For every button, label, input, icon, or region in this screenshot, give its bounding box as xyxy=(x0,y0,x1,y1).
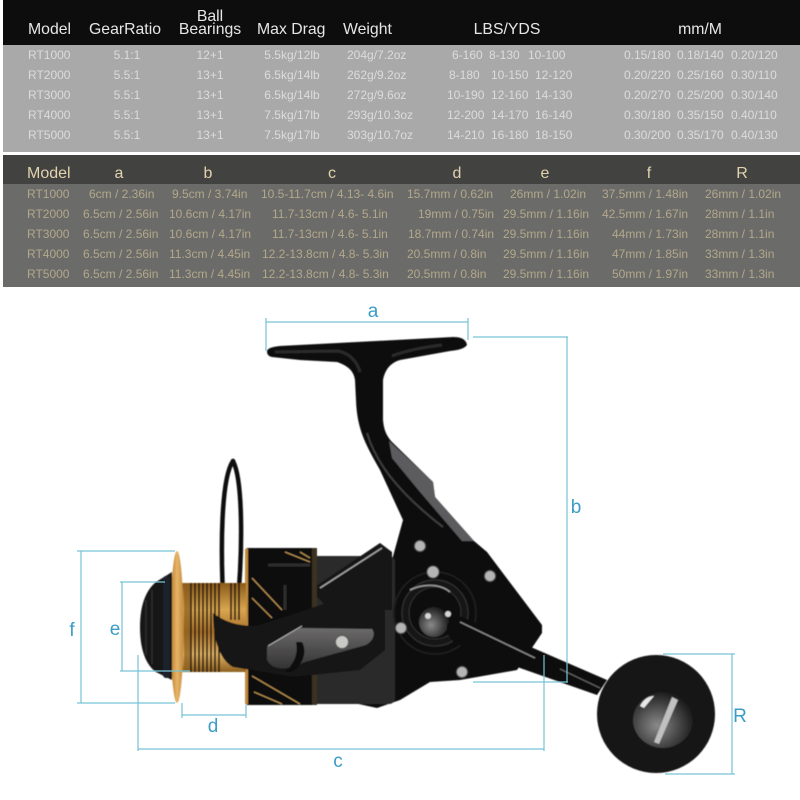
dimensions row: RT2000: RT2000 xyxy=(27,207,70,221)
dimension d: d xyxy=(208,716,218,737)
dimensions row: RT4000: 29.5mm / 1.16in xyxy=(503,247,589,261)
row: RT1000: 0.18/140 xyxy=(677,48,724,62)
row: RT5000: 0.35/170 xyxy=(677,128,724,142)
table header row: LBS/YDS xyxy=(474,21,540,38)
dimensions row: RT4000: 12.2-13.8cm / 4.8- 5.3in xyxy=(262,247,389,261)
dimensions row: RT1000: 37.5mm / 1.48in xyxy=(602,187,688,201)
row: RT1000: 10-100 xyxy=(528,48,566,62)
row: RT5000: 16-180 xyxy=(491,128,529,142)
dimensions row: RT1000: RT1000 xyxy=(27,187,70,201)
dimensions row: RT1000: 15.7mm / 0.62in xyxy=(407,187,493,201)
dimension b xyxy=(473,337,581,682)
dimensions row: RT1000: 26mm / 1.02in xyxy=(510,187,586,201)
row: RT5000 xyxy=(28,128,778,142)
row: RT1000: 204g/7.2oz xyxy=(347,48,406,62)
rotor skirt with gold trim xyxy=(245,548,317,705)
spool front knob xyxy=(140,572,172,680)
dimensions row: RT4000 xyxy=(27,247,774,261)
crank handle arm xyxy=(447,615,607,695)
dimensions row: RT3000: 6.5cm / 2.56in xyxy=(83,227,158,241)
row: RT5000: 7.5kg/17lb xyxy=(264,128,320,142)
dimensions row: RT3000: 28mm / 1.1in xyxy=(705,227,774,241)
dimension e: e xyxy=(110,619,120,640)
dimensions row: RT4000: 33mm / 1.3in xyxy=(705,247,774,261)
row: RT3000: 12-160 xyxy=(491,88,529,102)
row: RT2000: 12-120 xyxy=(535,68,573,82)
panel: dimensions table xyxy=(3,155,800,287)
row: RT1000: 0.15/180 xyxy=(624,48,671,62)
dimensions row: RT2000: 29.5mm / 1.16in xyxy=(503,207,589,221)
table header row: mm/M xyxy=(678,21,722,38)
row: RT2000 xyxy=(28,68,777,82)
dimensions row: RT4000: 11.3cm / 4.45in xyxy=(169,247,250,261)
row: RT1000: 6-160 xyxy=(452,48,483,62)
row: RT2000: 13+1 xyxy=(196,68,224,82)
rotor housing xyxy=(300,543,395,704)
table header row xyxy=(28,8,722,38)
row: RT4000: 5.5:1 xyxy=(114,108,141,122)
dimensions row: RT5000: 33mm / 1.3in xyxy=(705,267,774,281)
row: RT5000: 0.30/200 xyxy=(624,128,671,142)
row: RT4000: 16-140 xyxy=(535,108,573,122)
row: RT3000 xyxy=(28,88,778,102)
row: RT2000: 0.20/220 xyxy=(624,68,671,82)
dimensions row: RT2000 xyxy=(27,207,774,221)
dimensions row: RT5000: 20.5mm / 0.8in xyxy=(407,267,486,281)
dimension a xyxy=(266,301,468,351)
dimensions row: RT3000: 44mm / 1.73in xyxy=(612,227,688,241)
dimension f: f xyxy=(69,620,75,641)
table header row: GearRatio xyxy=(89,21,161,38)
dimensions row: RT1000 xyxy=(27,187,781,201)
dimensions header row: b xyxy=(204,165,213,182)
row: RT5000: RT5000 xyxy=(28,128,71,142)
row: RT4000: 0.30/180 xyxy=(624,108,671,122)
crank handle knob xyxy=(597,655,715,773)
row: RT2000: RT2000 xyxy=(28,68,71,82)
dimensions header row: c xyxy=(328,165,336,182)
dimensions row: RT5000: 11.3cm / 4.45in xyxy=(169,267,250,281)
dimensions row: RT4000: 6.5cm / 2.56in xyxy=(83,247,158,261)
row: RT4000: 293g/10.3oz xyxy=(347,108,413,122)
dimensions row: RT4000: 47mm / 1.85in xyxy=(612,247,688,261)
dimension a: a xyxy=(368,301,379,322)
row: RT3000: 6.5kg/14lb xyxy=(264,88,320,102)
dimensions row: RT1000: 10.5-11.7cm / 4.13- 4.6in xyxy=(261,187,394,201)
row: RT1000: 0.20/120 xyxy=(731,48,778,62)
dimensions row: RT5000: 29.5mm / 1.16in xyxy=(503,267,589,281)
dimensions header row: f xyxy=(647,165,652,182)
dimensions row: RT2000: 42.5mm / 1.67in xyxy=(602,207,688,221)
dimensions row: RT2000: 19mm / 0.75in xyxy=(418,207,494,221)
row: RT2000: 0.30/110 xyxy=(731,68,777,82)
illustration: fishing reel xyxy=(140,337,715,773)
dimension b: b xyxy=(571,497,581,518)
bail wire xyxy=(222,461,241,612)
row: RT1000: 5.1:1 xyxy=(114,48,141,62)
row: RT4000: 14-170 xyxy=(491,108,529,122)
table header row: Model xyxy=(28,21,71,38)
dimensions header row: a xyxy=(115,165,124,182)
row: RT4000 xyxy=(28,108,777,122)
dimensions row: RT4000: RT4000 xyxy=(27,247,70,261)
table header row: Ball xyxy=(197,8,223,25)
row: RT2000: 5.5:1 xyxy=(114,68,141,82)
dimension R: R xyxy=(733,706,747,727)
dimension R xyxy=(663,654,747,774)
dimensions row: RT5000: 50mm / 1.97in xyxy=(612,267,688,281)
row: RT5000: 303g/10.7oz xyxy=(347,128,413,142)
dimensions row: RT2000: 11.7-13cm / 4.6- 5.1in xyxy=(272,207,388,221)
dimensions row: RT2000: 28mm / 1.1in xyxy=(705,207,774,221)
dimensions row: RT3000: 29.5mm / 1.16in xyxy=(503,227,589,241)
dimension f xyxy=(69,551,175,703)
row: RT1000: RT1000 xyxy=(28,48,71,62)
row: RT4000: 12-200 xyxy=(447,108,485,122)
bail arm xyxy=(213,603,385,677)
row: RT3000: 13+1 xyxy=(196,88,224,102)
row: RT3000: 14-130 xyxy=(535,88,573,102)
dimension e xyxy=(110,582,190,671)
dimensions header row: e xyxy=(541,165,550,182)
row: RT5000: 5.5:1 xyxy=(114,128,141,142)
row: RT5000: 13+1 xyxy=(196,128,224,142)
dimensions row: RT5000: 12.2-13.8cm / 4.8- 5.3in xyxy=(262,267,389,281)
dimensions row: RT1000: 6cm / 2.36in xyxy=(89,187,154,201)
dimensions row: RT2000: 10.6cm / 4.17in xyxy=(169,207,251,221)
row: RT2000: 262g/9.2oz xyxy=(347,68,406,82)
dimensions row: RT3000: RT3000 xyxy=(27,227,70,241)
spool flange xyxy=(170,551,184,703)
table header row: Weight xyxy=(343,21,392,38)
row: RT4000: 0.35/150 xyxy=(677,108,724,122)
dimensions row: RT5000 xyxy=(27,267,774,281)
dimension c xyxy=(138,655,544,772)
dimension d xyxy=(182,703,246,737)
row: RT2000: 0.25/160 xyxy=(677,68,724,82)
dimensions row: RT5000: 6.5cm / 2.56in xyxy=(83,267,158,281)
row: RT3000: 0.20/270 xyxy=(624,88,671,102)
row: RT1000: 5.5kg/12lb xyxy=(264,48,320,62)
row: RT3000: 0.30/140 xyxy=(731,88,778,102)
spool xyxy=(180,583,246,672)
row: RT1000: 12+1 xyxy=(196,48,224,62)
reel foot and stem xyxy=(267,337,542,708)
row: RT5000: 18-150 xyxy=(535,128,573,142)
row: RT5000: 14-210 xyxy=(447,128,485,142)
table header row: Max Drag xyxy=(257,21,325,38)
table header row: Bearings xyxy=(179,21,241,38)
row: RT1000 xyxy=(28,48,778,62)
row: RT3000: 0.25/200 xyxy=(677,88,724,102)
row: RT2000: 8-180 xyxy=(449,68,480,82)
dimensions row: RT1000: 26mm / 1.02in xyxy=(705,187,781,201)
dimensions row: RT3000: 11.7-13cm / 4.6- 5.1in xyxy=(272,227,388,241)
row: RT3000: 5.5:1 xyxy=(114,88,141,102)
side plate and gear cap xyxy=(394,572,476,654)
row: RT4000: 0.40/110 xyxy=(731,108,777,122)
dimensions header row: Model xyxy=(27,165,71,182)
dimensions row: RT3000 xyxy=(27,227,774,241)
dimensions row: RT4000: 20.5mm / 0.8in xyxy=(407,247,486,261)
row: RT1000: 8-130 xyxy=(489,48,520,62)
dimensions row: RT3000: 10.6cm / 4.17in xyxy=(169,227,251,241)
dimensions header row: R xyxy=(736,165,748,182)
body screws xyxy=(396,540,496,678)
row: RT2000: 10-150 xyxy=(491,68,529,82)
dimensions row: RT1000: 9.5cm / 3.74in xyxy=(172,187,247,201)
row: RT2000: 6.5kg/14lb xyxy=(264,68,320,82)
row: RT3000: 10-190 xyxy=(447,88,485,102)
dimensions header row xyxy=(27,165,748,182)
row: RT3000: 272g/9.6oz xyxy=(347,88,406,102)
dimensions row: RT2000: 6.5cm / 2.56in xyxy=(83,207,158,221)
dimensions row: RT5000: RT5000 xyxy=(27,267,70,281)
dimensions row: RT3000: 18.7mm / 0.74in xyxy=(408,227,494,241)
row: RT4000: 7.5kg/17lb xyxy=(264,108,320,122)
row: RT4000: 13+1 xyxy=(196,108,224,122)
row: RT3000: RT3000 xyxy=(28,88,71,102)
row: RT4000: RT4000 xyxy=(28,108,71,122)
row: RT5000: 0.40/130 xyxy=(731,128,778,142)
panel: performance specification table xyxy=(3,0,800,152)
dimension c: c xyxy=(333,751,343,772)
dimensions header row: d xyxy=(453,165,461,182)
